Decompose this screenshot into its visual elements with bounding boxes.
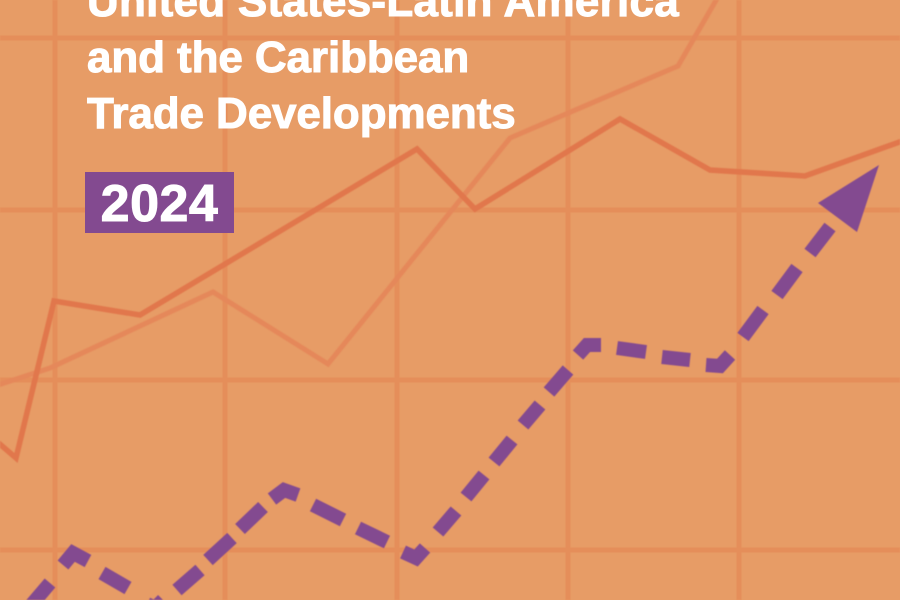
title (87, 0, 680, 138)
title: and the Caribbean (87, 33, 469, 82)
dashed purple arrow line (27, 165, 879, 600)
title: Trade Developments (87, 89, 516, 138)
year badge: 2024 (101, 175, 218, 233)
light trend line (0, 0, 722, 386)
dark trend line (0, 119, 900, 458)
arrowhead (818, 165, 879, 232)
